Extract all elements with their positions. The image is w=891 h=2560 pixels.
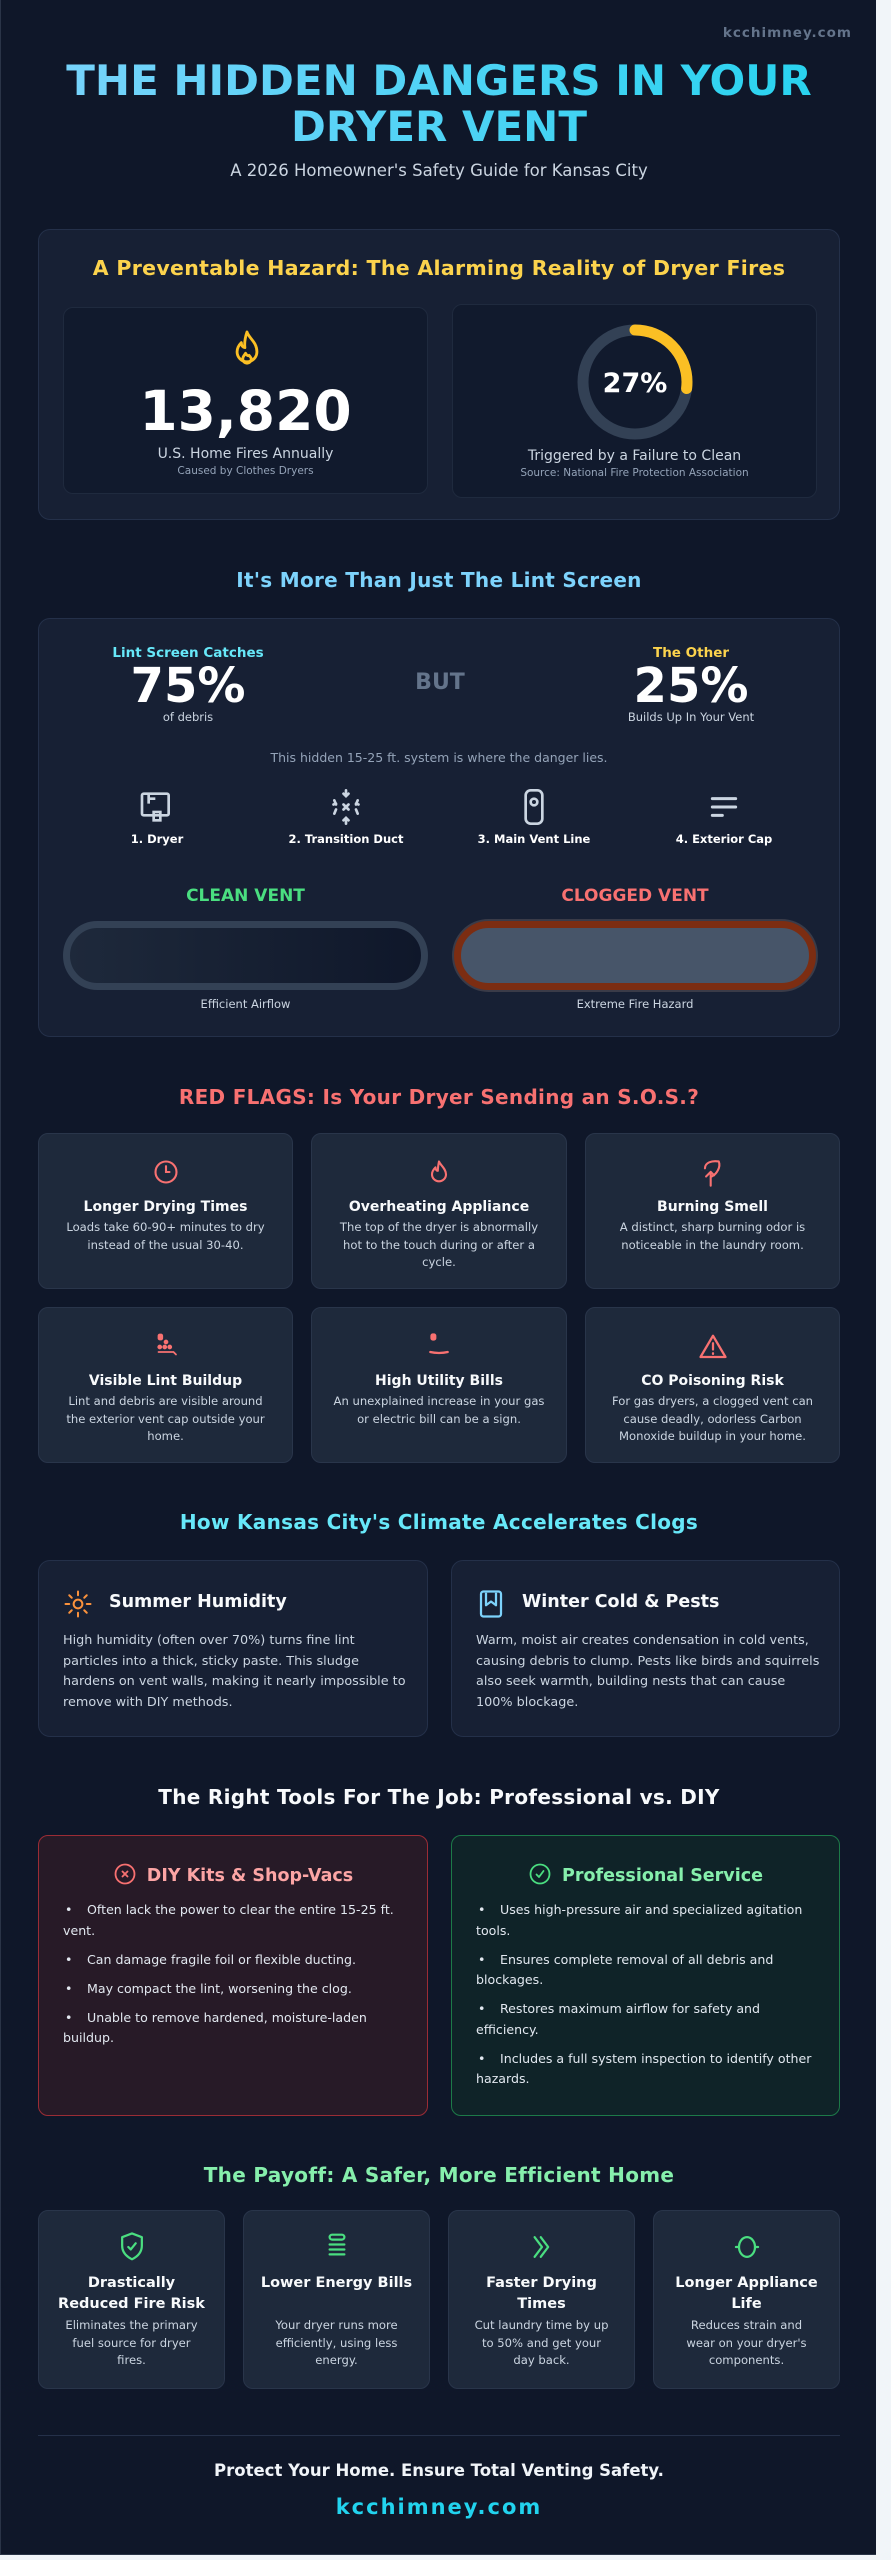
title (1, 58, 877, 150)
DIY list: May compact the lint, worsening the clog. (87, 1980, 352, 1996)
footer url: kcchimney.com (336, 2495, 542, 2519)
red flag card: longer drying: Longer Drying Times (84, 1199, 247, 1215)
title: THE HIDDEN DANGERS IN YOUR (66, 56, 812, 105)
caption: efficient airflow: Efficient Airflow (201, 997, 290, 1011)
red flag card: CO risk: CO Poisoning Risk (641, 1373, 784, 1389)
number: 13,820 (139, 379, 352, 443)
donut chart (578, 324, 692, 440)
text: hidden system: This hidden 15-25 ft. system is where the danger lies. (270, 750, 608, 765)
red flag card: burning smell: A distinct, sharp burning odor is noticeable in the laundry room. (620, 1220, 805, 1252)
label: clean vent: CLEAN VENT (186, 886, 305, 906)
payoff card: faster: Faster Drying Times (486, 2275, 597, 2312)
icon: dryer (131, 792, 184, 846)
pro list: Ensures complete removal of all debris and blockages. (476, 1952, 773, 1987)
icon: sun (64, 1590, 92, 1618)
icon: chevrons (534, 2236, 550, 2258)
stat: 25%: 25% (634, 658, 748, 714)
pipe: clean (63, 921, 428, 990)
panel: vent system (38, 618, 840, 1037)
payoff card: faster (448, 2210, 635, 2389)
red flag card: burning smell: Burning Smell (657, 1199, 768, 1215)
red flag card: burning smell (585, 1133, 840, 1289)
stat: 75%: of debris (163, 710, 213, 724)
DIY list: Often lack the power to clear the entire 15-25 ft. vent. (63, 1902, 394, 1938)
icon: main vent line: 3. Main Vent Line (478, 832, 590, 846)
icon: bookmark (480, 1590, 502, 1618)
panel: professional (451, 1835, 840, 2116)
pro heading: Professional Service (562, 1866, 763, 1886)
icon: warning (699, 1334, 727, 1358)
red flag card: visible lint: Lint and debris are visible around the exterior vent cap outside your home. (66, 1394, 265, 1443)
stat: 25% (628, 645, 754, 724)
icon: main vent line (478, 789, 590, 846)
icon: lint (157, 1334, 177, 1356)
icon: flame (236, 330, 258, 365)
heading: preventable hazard: A Preventable Hazard: The Alarming Reality of Dryer Fires (93, 256, 785, 280)
label: Triggered by a Failure to Clean (528, 448, 741, 464)
text: High humidity (often over 70%) turns fine lint particles into a thick, sticky paste. This sludge hardens on vent walls, making it nearly impossible to remove with DIY methods. (63, 1633, 406, 1710)
subtitle: A 2026 Homeowner's Safety Guide for Kansas City (230, 161, 648, 180)
source: Source: National Fire Protection Association (520, 467, 749, 479)
stat: 75%: 75% (131, 658, 245, 714)
payoff card: energy (243, 2210, 430, 2389)
pro list (476, 1902, 812, 2086)
pro list: Restores maximum airflow for safety and efficiency. (476, 2001, 760, 2036)
icon: smell (704, 1160, 720, 1187)
sublabel: Caused by Clothes Dryers (177, 465, 314, 477)
red flag card: visible lint: Visible Lint Buildup (89, 1373, 242, 1389)
donut chart: 27% (603, 368, 667, 399)
payoff card: appliance life: Longer Appliance Life (675, 2275, 818, 2312)
pipe: clogged (454, 921, 816, 990)
label: U.S. Home Fires Annually (158, 446, 333, 462)
red flag card: visible lint (38, 1307, 293, 1463)
icon: clock (154, 1160, 178, 1184)
title: Summer Humidity (109, 1592, 287, 1612)
text: Warm, moist air creates condensation in cold vents, causing debris to clump. Pests like birds and squirrels also seek warmth, building nests that can cause 100% blockage. (476, 1633, 819, 1710)
payoff card: energy: Lower Energy Bills (261, 2275, 412, 2291)
icon: flame (430, 1160, 448, 1182)
red flag card: overheating: Overheating Appliance (349, 1199, 529, 1215)
red flag card: utility bills: High Utility Bills (375, 1373, 503, 1389)
pro list: Uses high-pressure air and specialized agitation tools. (476, 1902, 802, 1938)
icon: shield (121, 2232, 143, 2260)
icon: dryer: 1. Dryer (131, 832, 183, 846)
stat card: 27% donut (452, 304, 817, 498)
climate card: winter pests (451, 1560, 840, 1737)
red flag card: overheating (311, 1133, 567, 1289)
heading: payoff: The Payoff: A Safer, More Efficient Home (204, 2163, 674, 2187)
DIY list: Can damage fragile foil or flexible ducting. (87, 1952, 356, 1966)
DIY heading: DIY Kits & Shop-Vacs (147, 1866, 353, 1886)
payoff card: energy: Your dryer runs more efficiently, using less energy. (275, 2318, 398, 2367)
red flag card: longer drying: Loads take 60-90+ minutes to dry instead of the usual 30-40. (66, 1220, 265, 1252)
text: BUT: BUT (415, 670, 465, 695)
icon: stack (328, 2234, 346, 2256)
top brand: kcchimney.com (723, 25, 852, 41)
icon: exterior cap (676, 797, 772, 846)
DIY list: Unable to remove hardened, moisture-laden buildup. (63, 2010, 367, 2045)
payoff card: fire risk: Eliminates the primary fuel source for dryer fires. (65, 2318, 198, 2367)
red flag card: longer drying (38, 1133, 293, 1289)
climate card: summer humidity (38, 1560, 428, 1737)
caption: fire hazard: Extreme Fire Hazard (577, 997, 693, 1011)
stat: 25%: The Other (653, 645, 729, 661)
footer tagline: Protect Your Home. Ensure Total Venting Safety. (214, 2461, 664, 2480)
panel: DIY (38, 1835, 428, 2116)
payoff card: appliance life (653, 2210, 840, 2389)
vent system steps (131, 789, 772, 846)
stat: 75% (112, 645, 264, 724)
label: clogged vent: CLOGGED VENT (561, 886, 709, 906)
payoff card: fire risk (38, 2210, 225, 2389)
icon: cycle (734, 2236, 760, 2258)
title: Winter Cold & Pests (522, 1592, 719, 1612)
DIY list (63, 1902, 394, 2045)
red flag card: CO risk: For gas dryers, a clogged vent can cause deadly, odorless Carbon Monoxide buildup in your home. (612, 1394, 813, 1443)
payoff card: fire risk: Drastically Reduced Fire Risk (58, 2275, 205, 2312)
stat: 25%: Builds Up In Your Vent (628, 710, 754, 724)
title: DRYER VENT (291, 102, 587, 151)
icon: exterior cap: 4. Exterior Cap (676, 832, 772, 846)
red flag card: CO risk (585, 1307, 840, 1463)
panel: dryer fire stats (38, 229, 840, 520)
icon: transition duct (289, 789, 404, 846)
payoff card: faster: Cut laundry time by up to 50% and get your day back. (475, 2318, 608, 2367)
stat card: 13,820 fires (63, 307, 428, 494)
payoff card: appliance life: Reduces strain and wear on your dryer's components. (686, 2318, 807, 2367)
heading: lint screen: It's More Than Just The Lint Screen (236, 568, 642, 592)
heading: tools: The Right Tools For The Job: Professional vs. DIY (158, 1785, 720, 1809)
red flag card: utility bills (311, 1307, 567, 1463)
icon: transition duct: 2. Transition Duct (289, 832, 403, 846)
stat: 75%: Lint Screen Catches (112, 645, 264, 661)
heading: red flags: RED FLAGS: Is Your Dryer Sending an S.O.S.? (179, 1085, 699, 1109)
red flag card: utility bills: An unexplained increase in your gas or electric bill can be a sign. (334, 1394, 544, 1426)
pro list: Includes a full system inspection to identify other hazards. (476, 2050, 811, 2086)
icon: bill (429, 1333, 449, 1354)
heading: climate: How Kansas City's Climate Accelerates Clogs (180, 1510, 698, 1534)
red flag card: overheating: The top of the dryer is abnormally hot to the touch during or after a cycle. (340, 1220, 538, 1269)
